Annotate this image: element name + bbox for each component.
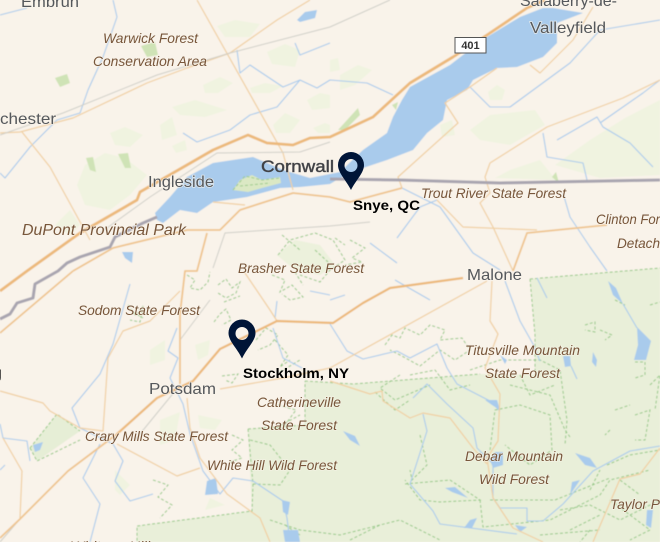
place labels: Brasher State Forest [238,260,365,276]
place labels: Malone [467,267,522,284]
forest dashes [30,233,660,542]
place labels: Taylor P [610,496,660,512]
main roads [0,188,607,538]
pin: Snye [338,152,364,190]
highway shield 401 [455,38,486,53]
place labels: Catherineville [257,394,341,410]
place labels: Trout River State Forest [421,185,567,201]
highways [0,0,545,434]
place labels: Crary Mills State Forest [85,428,229,444]
marker: Snye, QC [338,152,420,213]
place labels: Valleyfield [530,20,606,37]
gray boundary lines [0,0,390,542]
place labels: Ingleside [148,174,214,191]
place labels: State Forest [261,417,338,433]
place labels: Warwick Forest [103,30,199,46]
label: Stockholm, NY: Stockholm, NY [243,365,350,381]
place labels: White Hill Wild Forest [207,457,338,473]
place labels: Sodom State Forest [78,302,201,318]
place labels: Potsdam [149,381,216,398]
place labels: chester [0,111,57,128]
place labels: Wild Forest [479,471,550,487]
darker forest patches [55,42,559,183]
place labels: Conservation Area [93,53,207,69]
label: Snye, QC: Snye, QC [353,197,420,213]
highway shield 401: 401 [461,40,480,52]
pin: Stockholm [228,320,256,358]
marker: Stockholm, NY [228,320,350,381]
place labels: Debar Mountain [465,448,563,464]
protected park land [137,268,660,542]
water: lake Saint Francis [155,8,583,223]
place labels: Cornwall [261,157,334,176]
place labels: DuPont Provincial Park [22,222,187,239]
island in the lake [233,175,281,192]
place labels: State Forest [485,365,561,381]
place labels: Titusville Mountain [465,342,580,358]
international border [0,179,660,319]
